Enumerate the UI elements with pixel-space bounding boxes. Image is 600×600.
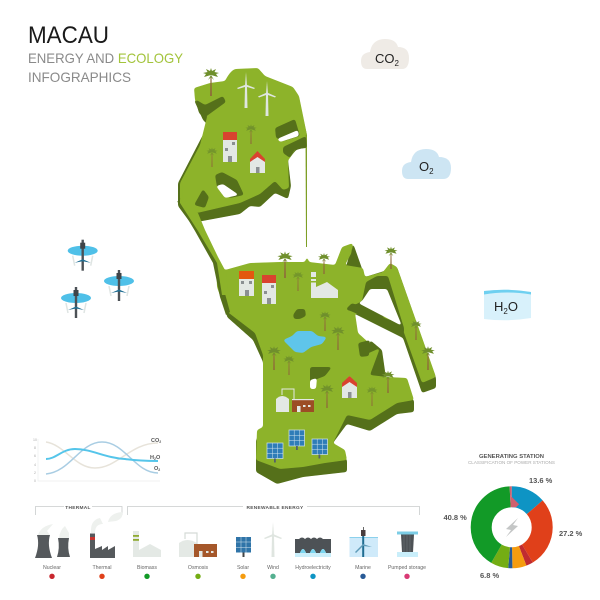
line chart: O xyxy=(156,455,161,461)
donut percentage labels: 13.6 % xyxy=(529,476,553,485)
line chart: 2 xyxy=(158,468,160,472)
donut heading: GENERATING STATION xyxy=(479,454,544,460)
marine turbines xyxy=(61,240,134,318)
cloud: CO2 xyxy=(361,39,409,69)
line chart: 8 xyxy=(34,446,36,450)
icon: osmosis xyxy=(179,533,217,579)
title: INFOGRAPHICS xyxy=(28,69,131,85)
title: MACAU xyxy=(28,22,109,49)
map factory xyxy=(311,272,338,298)
donut percentage labels: 6.8 % xyxy=(480,571,500,580)
map osmosis plant xyxy=(276,389,314,412)
map: lower island xyxy=(177,199,436,484)
donut chart xyxy=(481,497,542,558)
icon: osmosis: Osmosis xyxy=(188,565,208,571)
icon: thermal: Thermal xyxy=(92,565,112,571)
map wind turbines xyxy=(237,72,276,116)
map: upper island xyxy=(178,68,307,247)
title: ENERGY AND ECOLOGY xyxy=(28,50,184,66)
icon: marine: Marine xyxy=(355,565,371,571)
line chart: 2 xyxy=(154,457,156,461)
icon: biomass xyxy=(133,531,161,579)
donut percentage labels xyxy=(444,476,583,580)
bracket: renewable energy: RENEWABLE ENERGY xyxy=(246,505,304,511)
line chart: 0 xyxy=(34,479,36,483)
line chart: 6 xyxy=(34,454,36,458)
bracket: thermal: THERMAL xyxy=(65,505,91,511)
map solar panels xyxy=(267,430,328,462)
water block: H2O: H xyxy=(494,299,503,314)
icon: nuclear xyxy=(35,524,70,579)
cloud: O2: 2 xyxy=(429,167,434,176)
donut percentage labels: 40.8 % xyxy=(444,513,467,522)
icon: hydroelectricity: Hydroelectricity xyxy=(295,565,331,571)
line chart: O xyxy=(154,466,158,472)
icon: hydroelectricity xyxy=(295,538,331,579)
title xyxy=(28,22,184,85)
icon: marine xyxy=(350,527,378,579)
line chart: 2 xyxy=(159,440,161,444)
donut heading xyxy=(468,454,555,465)
cloud: CO2: CO xyxy=(375,51,394,66)
donut heading: CLASSIFICATION OF POWER STATIONS xyxy=(468,460,555,465)
icon: solar xyxy=(236,537,251,579)
cloud: O2: O xyxy=(419,159,429,174)
map houses xyxy=(223,132,357,398)
icon: pumped storage: Pumped storage xyxy=(388,565,426,571)
palm trees xyxy=(203,68,435,408)
water block: H2O: 2 xyxy=(503,307,508,316)
icon: wind xyxy=(264,522,282,579)
lake xyxy=(283,331,327,353)
icon: pumped storage xyxy=(388,532,426,579)
water block: H2O xyxy=(484,290,531,320)
cloud: CO2: 2 xyxy=(394,59,400,68)
icon: nuclear: Nuclear xyxy=(43,565,61,571)
line chart: 2 xyxy=(34,471,36,475)
line chart: 10 xyxy=(33,438,37,442)
icon: thermal xyxy=(90,512,122,579)
water block: H2O: O xyxy=(508,299,518,314)
icon: solar: Solar xyxy=(237,565,249,571)
icon: biomass: Biomass xyxy=(137,565,157,571)
donut percentage labels: 27.2 % xyxy=(559,529,583,538)
icon: wind: Wind xyxy=(267,565,279,571)
cloud: O2 xyxy=(402,149,451,179)
line chart: 4 xyxy=(34,463,36,467)
bracket: thermal xyxy=(36,505,122,515)
line chart xyxy=(33,438,161,483)
bracket: renewable energy xyxy=(128,505,420,515)
line chart: H xyxy=(150,455,154,461)
line chart: CO xyxy=(151,438,159,444)
